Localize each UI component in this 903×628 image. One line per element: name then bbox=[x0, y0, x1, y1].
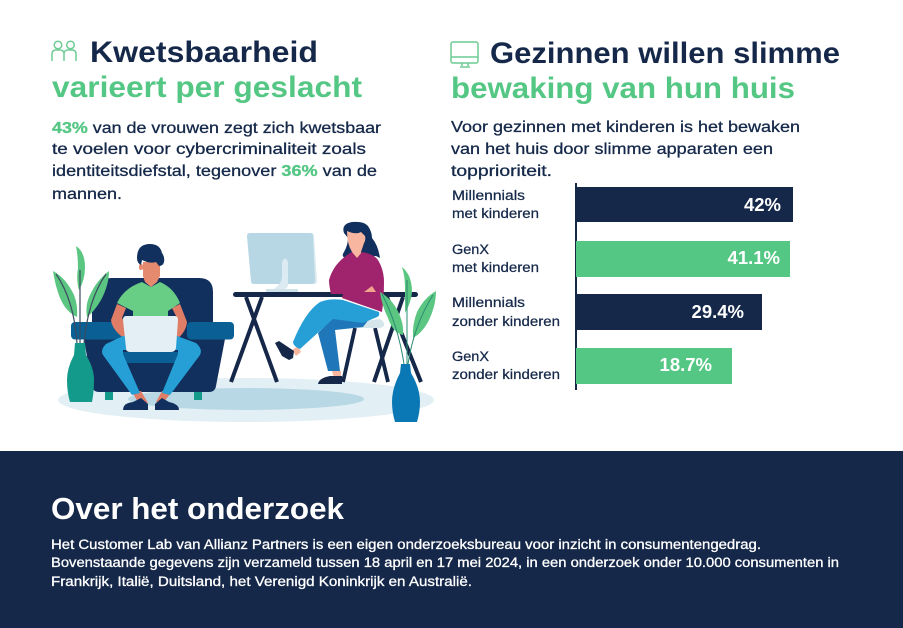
bar chart bbox=[452, 183, 793, 390]
text block: vulnerability bbox=[52, 120, 382, 203]
desk bbox=[231, 292, 421, 382]
heading: Gezinnen: Gezinnen willen slimme bbox=[490, 37, 840, 70]
bar: GenX met kinderen: GenX bbox=[452, 242, 489, 257]
text block: families bbox=[451, 119, 800, 180]
bar: GenX met kinderen bbox=[452, 241, 790, 277]
illustration: people working at home bbox=[53, 222, 436, 422]
icon: monitor bbox=[451, 42, 478, 67]
shoes bbox=[123, 398, 148, 410]
front foot bbox=[292, 346, 301, 356]
text block: research details bbox=[51, 537, 839, 589]
bar: Millennials met kinderen: met kinderen bbox=[452, 206, 539, 221]
text block: vulnerability: mannen. bbox=[52, 186, 122, 203]
bar: Millennials zonder kinderen: 29.4% bbox=[692, 301, 744, 322]
bar: Millennials zonder kinderen: Millennials bbox=[452, 295, 525, 310]
man bbox=[102, 244, 201, 410]
heading: Gezinnen bbox=[451, 37, 840, 105]
text block: families: van het huis door slimme apparaten een bbox=[451, 141, 773, 158]
text block: vulnerability: identiteitsdiefstal, tegenover 36% van de bbox=[52, 163, 377, 180]
armchair bbox=[71, 278, 234, 400]
front leg bbox=[293, 299, 379, 349]
left plant bbox=[53, 246, 109, 343]
shirt bbox=[117, 282, 180, 318]
text block: research details: Frankrijk, Italië, Duitsland, het Verenigd Koninkrijk en Australië. bbox=[51, 574, 472, 589]
head bbox=[143, 262, 160, 287]
stool bbox=[343, 328, 388, 382]
arms bbox=[111, 304, 129, 339]
monitor bbox=[247, 233, 317, 292]
hand on desk bbox=[364, 286, 376, 292]
back foot bbox=[332, 371, 341, 378]
hair bbox=[343, 222, 380, 258]
bar: GenX zonder kinderen: zonder kinderen bbox=[452, 367, 560, 382]
bar: Millennials met kinderen: Millennials bbox=[452, 188, 525, 203]
ankles bbox=[132, 391, 148, 403]
legs bbox=[102, 336, 140, 395]
bar: Millennials met kinderen bbox=[452, 187, 793, 222]
text block: research details: Het Customer Lab van Allianz Partners is een eigen onderzoeksbureau voor inzicht in consumentengedrag. bbox=[51, 537, 761, 552]
heading: Gezinnen: bewaking van hun huis bbox=[451, 72, 795, 105]
bar: Millennials met kinderen: 42% bbox=[744, 194, 781, 215]
back leg bbox=[318, 318, 370, 371]
panel: about the research bbox=[0, 451, 903, 628]
text block: research details: Bovenstaande gegevens zijn verzameld tussen 18 april en 17 mei 2024, in een onderzoek onder 10.000 consumenten in bbox=[51, 555, 839, 570]
heading: Kwetsbaarheid: Kwetsbaarheid bbox=[90, 36, 318, 69]
bar: GenX met kinderen: 41.1% bbox=[728, 247, 780, 268]
bar: Millennials zonder kinderen: zonder kinderen bbox=[452, 314, 560, 329]
floor shadow bbox=[58, 378, 434, 422]
vase teal bbox=[67, 343, 94, 402]
heading: Kwetsbaarheid: varieert per geslacht bbox=[52, 71, 362, 104]
right plant and vase bbox=[380, 267, 436, 422]
heading: Kwetsbaarheid bbox=[52, 36, 362, 104]
icon: two people bbox=[52, 41, 76, 61]
bar: GenX zonder kinderen: GenX bbox=[452, 349, 489, 364]
bar: GenX zonder kinderen bbox=[452, 348, 732, 384]
heading: Over het onderzoek: Over het onderzoek bbox=[51, 491, 345, 526]
laptop bbox=[123, 316, 178, 352]
woman bbox=[275, 222, 388, 384]
text block: families: Voor gezinnen met kinderen is het bewaken bbox=[451, 119, 800, 136]
face bbox=[347, 231, 365, 258]
bar: GenX met kinderen: met kinderen bbox=[452, 260, 539, 275]
bar: GenX zonder kinderen: 18.7% bbox=[660, 354, 712, 375]
text block: vulnerability: 43% van de vrouwen zegt zich kwetsbaar bbox=[52, 120, 382, 137]
bar: Millennials zonder kinderen bbox=[452, 294, 762, 330]
text block: families: topprioriteit. bbox=[451, 163, 552, 180]
text block: vulnerability: te voelen voor cybercriminaliteit zoals bbox=[52, 141, 366, 158]
shirt bbox=[329, 252, 384, 312]
